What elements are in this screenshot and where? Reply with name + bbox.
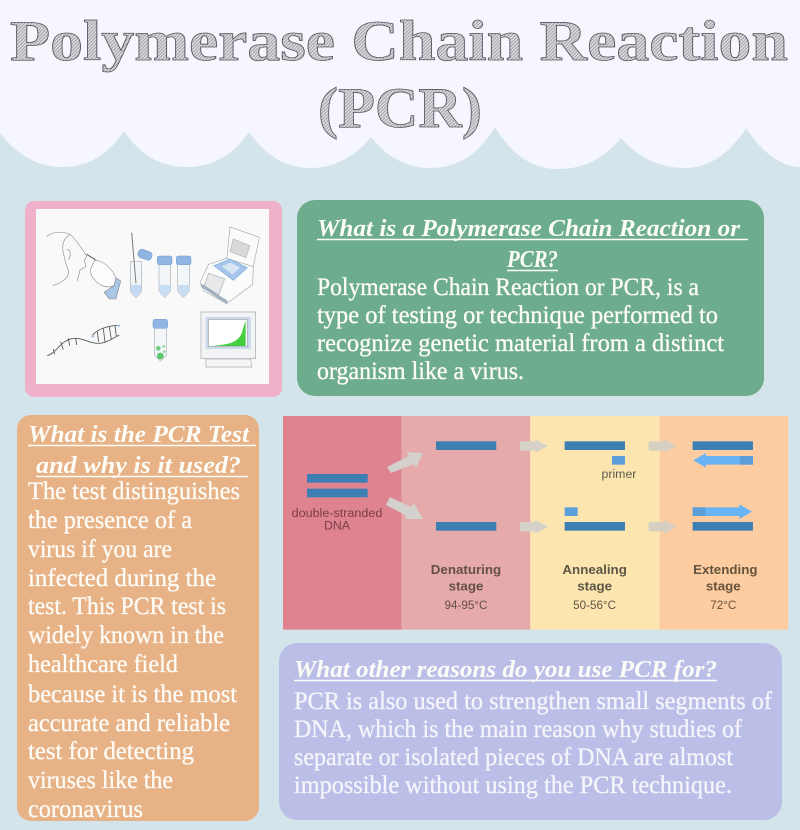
extending stage: Extending [693, 562, 757, 577]
title [10, 10, 788, 140]
arrows: annealing to extending [649, 439, 677, 534]
panel: other reasons for PCR [279, 643, 782, 820]
text block: the presence of a [28, 505, 192, 534]
icon: green sample tube [153, 319, 168, 361]
text block: viruses like the [28, 765, 173, 794]
text block: separate or isolated pieces of DNA are almost [294, 742, 733, 771]
panel: testing illustrations [25, 201, 282, 397]
icon: sample tube with swab [130, 233, 153, 298]
extending stage [693, 441, 757, 612]
annealing stage: stage [577, 579, 612, 594]
text block [28, 476, 240, 823]
heading [317, 216, 748, 273]
icon: nasal swab on patient [47, 232, 121, 299]
denaturing stage: 94-95°C [445, 599, 487, 612]
text block: test for detecting [28, 736, 194, 765]
text block: recognize genetic material from a distinct [317, 328, 724, 357]
text block [294, 686, 772, 799]
text block: healthcare field [28, 649, 178, 678]
text block: infected during the [28, 563, 216, 592]
text block: The test distinguishes [28, 476, 240, 505]
denaturing stage [431, 441, 501, 612]
text block: PCR is also used to strengthen small segments of [294, 686, 772, 715]
title: (PCR) [318, 77, 482, 140]
icon: thermal cycler [200, 227, 259, 304]
title: Polymerase Chain Reaction [10, 10, 788, 73]
header scalloped background [0, 0, 800, 169]
heading [28, 422, 256, 479]
heading: and why is it used? [36, 453, 241, 479]
panel: what is the PCR test [17, 415, 259, 823]
heading: What is the PCR Test [28, 422, 250, 448]
text block: impossible without using the PCR technique. [294, 770, 732, 799]
icon: capped tubes [157, 256, 191, 298]
text block: virus if you are [28, 534, 172, 563]
extending stage: 72°C [710, 599, 736, 612]
text block: type of testing or technique performed to [317, 300, 718, 329]
annealing stage: primer [601, 467, 636, 481]
text block: coronavirus [28, 794, 143, 823]
denaturing stage: stage [449, 579, 483, 594]
annealing stage: Annealing [562, 562, 627, 577]
icon: DNA helix [47, 324, 120, 356]
text block: because it is the most [28, 679, 237, 708]
heading: What other reasons do you use PCR for? [294, 657, 717, 683]
text block: test. This PCR test is [28, 591, 226, 620]
text block: accurate and reliable [28, 708, 230, 737]
heading: PCR? [506, 247, 558, 273]
text block: widely known in the [28, 620, 224, 649]
text block: DNA, which is the main reason why studies of [294, 714, 742, 743]
denaturing stage: Denaturing [431, 562, 501, 577]
double-stranded DNA: double-stranded [292, 506, 382, 520]
heading: What is a Polymerase Chain Reaction or [317, 216, 741, 242]
icon: computer monitor with amplification curve [201, 312, 256, 367]
annealing stage [562, 441, 636, 612]
annealing stage: 50-56°C [573, 599, 616, 612]
panel: what is PCR [297, 200, 764, 396]
double-stranded DNA: DNA [324, 518, 351, 532]
text block: organism like a virus. [317, 356, 524, 385]
text block: Polymerase Chain Reaction or PCR, is a [317, 272, 699, 301]
arrows: strand separation [386, 452, 423, 519]
extending stage: stage [706, 579, 741, 594]
double-stranded DNA [292, 474, 382, 532]
chart: PCR stages diagram [283, 416, 788, 630]
arrows: denaturing to annealing [520, 439, 548, 534]
text block [317, 272, 724, 385]
